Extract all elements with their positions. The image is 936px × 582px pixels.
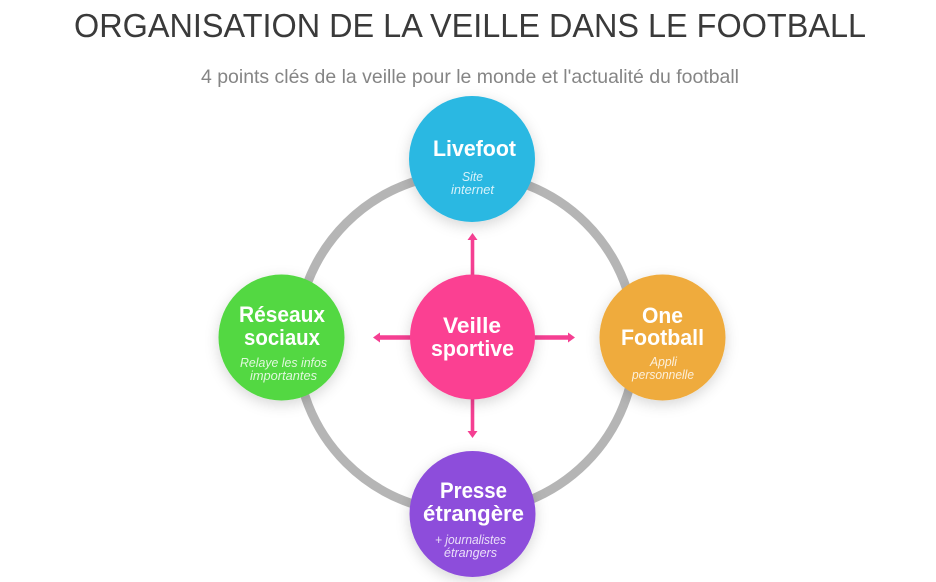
heading: Veille sportive: sportive [431,336,514,361]
caption: Relaye les infos importantes: importantes [250,369,317,383]
heading: Réseaux sociaux [239,302,326,350]
heading: Réseaux sociaux: Réseaux [239,302,326,327]
heading: Réseaux sociaux: sociaux [244,325,321,350]
node: Presse étrangère [410,451,536,577]
heading: One Football: Football [621,325,704,350]
caption: Relaye les infos importantes [240,356,327,383]
title: ORGANISATION DE LA VEILLE DANS LE FOOTBALL [74,7,866,44]
caption: Appli personnelle [631,355,694,382]
subtitle: 4 points clés de la veille pour le monde et l'actualité du football [201,66,739,88]
heading: Presse étrangère: Presse [440,478,507,503]
heading: One Football: One [642,303,683,328]
caption: Appli personnelle: personnelle [631,368,694,382]
ring connecting the four points [296,174,636,512]
caption: + journalistes étrangers [435,533,506,560]
node: Livefoot [409,96,535,222]
heading: Veille sportive: Veille [443,313,501,338]
caption: Site internet: internet [451,183,495,197]
heading: One Football [621,303,704,350]
arrow: up to Livefoot [468,233,478,276]
caption: + journalistes étrangers: étrangers [444,546,497,560]
node: Réseaux sociaux [218,274,344,400]
heading: Veille sportive [431,313,514,361]
arrow: left to Réseaux sociaux [373,332,412,342]
caption: + journalistes étrangers: + journalistes [435,533,506,547]
heading: Presse étrangère: étrangère [423,501,524,526]
caption: Relaye les infos importantes: Relaye les infos [240,356,327,370]
node: Veille sportive (centre) [410,274,535,400]
arrow: right to One Football [533,332,575,342]
caption: Site internet: Site [462,170,483,184]
node: One Football [600,274,726,400]
arrow: down to Presse étrangère [468,398,478,438]
heading: Presse étrangère [423,478,524,526]
caption: Appli personnelle: Appli [649,355,678,369]
heading: Livefoot: Livefoot [433,136,517,161]
caption: Site internet [451,170,495,197]
